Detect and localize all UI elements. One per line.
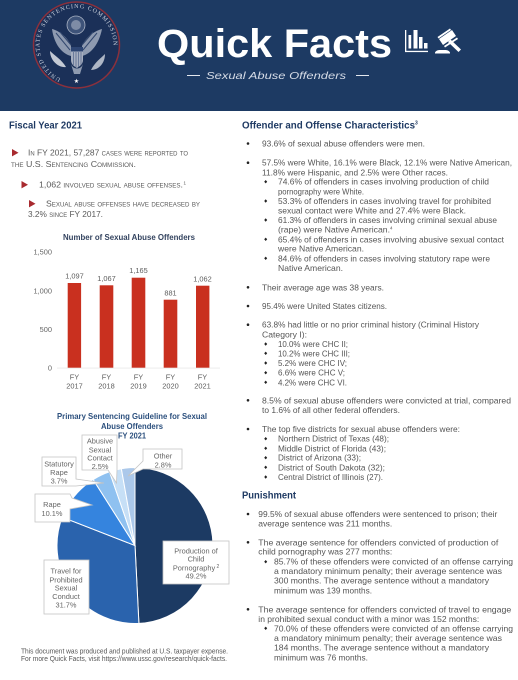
callout: other: 2.8%: [155, 460, 172, 470]
fiscal year facts: 3.2% since FY 2017.: [28, 209, 103, 219]
heading: fiscal year: Fiscal Year 2021: [9, 120, 82, 132]
header banner: [0, 0, 518, 111]
pie title: [57, 411, 207, 440]
characteristics list: Central District of Illinois (27).: [278, 472, 383, 482]
punishment list: average sentence was 211 months.: [258, 518, 392, 528]
icon: gavel: [435, 28, 461, 54]
characteristics list: 10.0% were CHC II;: [278, 339, 348, 349]
characteristics list: pornography were White.: [278, 186, 364, 196]
punishment list: 300 months. The average sentence without a mandatory: [274, 576, 490, 586]
seal of the commission: UNITED STATES SENTENCING COMMISSION: [36, 4, 118, 82]
punishment list: 184 months. The average sentence without a mandatory: [274, 643, 490, 653]
x axis labels: [66, 372, 211, 390]
y axis labels: 1,500: [34, 248, 52, 257]
y axis labels: 1,000: [34, 286, 52, 296]
characteristics list: [247, 138, 512, 482]
callout: rape: [35, 494, 92, 522]
x axis labels: 2020: [162, 381, 179, 390]
characteristics list: 11.8% were Hispanic, and 2.5% were Other races.: [262, 167, 448, 177]
x axis labels: 2019: [130, 381, 147, 390]
pie chart: primary sentencing guideline: [35, 411, 229, 623]
bullet markers: [247, 142, 267, 479]
callout: production of child pornography: Production of: [174, 546, 219, 556]
chart title: Number of Sexual Abuse Offenders: [63, 232, 195, 242]
characteristics list: 61.3% of offenders in cases involving criminal sexual abuse: [278, 215, 497, 225]
punishment list: The average sentence for offenders convicted of travel to engage: [258, 604, 512, 614]
characteristics list: Their average age was 38 years.: [262, 282, 384, 292]
punishment list: a mandatory minimum penalty; their average sentence was: [274, 633, 502, 643]
callout: other: [128, 449, 182, 476]
characteristics list: to 1.6% of all other federal offenders.: [262, 405, 400, 415]
footer note: [21, 648, 228, 663]
heading: offender and offense characteristics: Offender and Offense Characteristics: [242, 120, 415, 132]
characteristics list: District of South Dakota (32);: [278, 462, 385, 472]
fiscal year facts: Sexual abuse offenses have decreased by: [46, 198, 200, 208]
punishment list: 85.7% of these offenders were convicted of an offense carrying: [274, 557, 513, 567]
punishment list: minimum was 76 months.: [274, 652, 368, 662]
characteristics list: Native American.: [278, 263, 343, 273]
callout: abusive sexual contact: Sexual: [89, 446, 112, 454]
characteristics list: 4.2% were CHC VI.: [278, 377, 347, 387]
callout: production of child pornography: Pornography: [173, 564, 215, 572]
callout: statutory rape: Rape: [50, 468, 68, 477]
punishment list: The average sentence for offenders convicted of production of: [258, 537, 499, 547]
footer note: For more Quick Facts, visit https://www.ussc.gov/research/quick-facts.: [21, 656, 227, 663]
punishment list: minimum was 139 months.: [274, 585, 372, 595]
y axis labels: [34, 248, 52, 372]
bar values: 1,097: [65, 272, 84, 280]
characteristics list: were Native American.: [277, 244, 364, 254]
y axis labels: 0: [48, 364, 52, 372]
y axis labels: 500: [40, 325, 52, 334]
callout: production of child pornography: 2: [216, 564, 220, 570]
punishment list: in prohibited sexual conduct with a minor was 152 months:: [258, 614, 479, 624]
characteristics list: 63.8% had little or no prior criminal history (Criminal History: [262, 320, 480, 330]
callout: travel for prohibited sexual conduct: 31.7%: [56, 600, 77, 610]
callout: rape: Rape: [43, 500, 61, 509]
characteristics list: 5.2% were CHC IV;: [278, 358, 347, 368]
characteristics list: (rape) were Native American.: [278, 225, 390, 235]
fiscal year facts: In FY 2021, 57,287 cases were reported to: [28, 148, 188, 158]
footer note: This document was produced and published at U.S. taxpayer expense.: [21, 648, 228, 656]
bar chart: number of sexual abuse offenders: [34, 232, 220, 390]
callout: travel for prohibited sexual conduct: [44, 560, 89, 614]
bar values: [65, 266, 212, 298]
x axis labels: FY: [198, 372, 207, 382]
callout: abusive sexual contact: 2.5%: [92, 462, 109, 471]
bullet markers: [247, 513, 267, 630]
characteristics list: District of Arizona (33);: [278, 453, 361, 463]
callout: travel for prohibited sexual conduct: Prohibited: [49, 576, 83, 584]
fiscal year facts: [11, 148, 200, 219]
x axis labels: FY: [166, 372, 175, 382]
characteristics list: 93.6% of sexual abuse offenders were men.: [262, 138, 425, 148]
callout: travel for prohibited sexual conduct: Sexual: [55, 584, 78, 592]
pie title: Abuse Offenders: [101, 421, 163, 431]
fiscal year facts: the U.S. Sentencing Commission.: [11, 159, 136, 169]
x axis labels: FY: [102, 372, 111, 382]
callout: rape: 10.1%: [42, 509, 63, 518]
bar values: 1,062: [193, 274, 212, 284]
characteristics list: The top five districts for sexual abuse offenders were:: [262, 424, 460, 434]
characteristics list: 65.4% of offenders in cases involving abusive sexual contact: [278, 234, 505, 244]
callout: production of child pornography: Child: [188, 554, 204, 564]
icon: bar chart: [405, 30, 428, 52]
title: Quick Facts: [157, 22, 392, 66]
callout: travel for prohibited sexual conduct: Travel for: [51, 566, 82, 576]
callout: travel for prohibited sexual conduct: Conduct: [52, 592, 80, 601]
characteristics list: 84.6% of offenders in cases involving statutory rape were: [278, 253, 490, 263]
characteristics list: 95.4% were United States citizens.: [262, 301, 387, 311]
bars: [68, 278, 209, 368]
seal of the commission: ★: [74, 78, 79, 85]
characteristics list: 57.5% were White, 16.1% were Black, 12.1% were Native American,: [262, 158, 512, 168]
pie slices: [57, 468, 213, 623]
heading: punishment: Punishment: [242, 490, 296, 502]
characteristics list: 53.3% of offenders in cases involving travel for prohibited: [278, 196, 491, 206]
bar values: 881: [164, 288, 177, 298]
characteristics list: 8.5% of sexual abuse offenders were convicted at trial, compared: [262, 395, 511, 405]
callout: other: Other: [154, 452, 173, 460]
callout: abusive sexual contact: Contact: [87, 454, 113, 462]
x axis labels: 2017: [66, 381, 83, 390]
characteristics list: sexual contact were White and 27.4% were Black.: [278, 205, 466, 215]
fiscal year facts: 1: [184, 180, 186, 186]
x axis labels: 2018: [98, 381, 115, 390]
x axis labels: 2021: [194, 381, 211, 390]
punishment list: 70.0% of these offenders were convicted of an offense carrying: [274, 623, 513, 633]
characteristics list: 10.2% were CHC III;: [278, 348, 350, 358]
bar values: 1,165: [129, 266, 148, 275]
bar values: 1,067: [97, 274, 116, 283]
punishment list: child pornography was 277 months:: [258, 547, 392, 557]
characteristics list: 6.6% were CHC V;: [278, 368, 345, 378]
characteristics list: Middle District of Florida (43);: [278, 443, 386, 453]
punishment list: [247, 509, 513, 662]
pie title: Primary Sentencing Guideline for Sexual: [57, 411, 207, 421]
punishment list: 99.5% of sexual abuse offenders were sentenced to prison; their: [258, 509, 497, 519]
characteristics list: Category I):: [262, 329, 307, 339]
characteristics list: Northern District of Texas (48);: [278, 434, 389, 444]
x axis labels: FY: [70, 372, 79, 382]
characteristics list: 74.6% of offenders in cases involving production of child: [278, 177, 489, 187]
subtitle: Sexual Abuse Offenders: [206, 70, 347, 82]
callout: abusive sexual contact: [82, 435, 117, 483]
callout: production of child pornography: 49.2%: [186, 572, 207, 580]
callout: abusive sexual contact: Abusive: [87, 436, 113, 446]
x axis labels: FY: [134, 372, 143, 382]
callout: production of child pornography: [163, 541, 229, 584]
fiscal year facts: 1,062 involved sexual abuse offenses.: [39, 180, 183, 190]
callout: statutory rape: 3.7%: [51, 476, 68, 486]
pie title: FY 2021: [118, 430, 146, 440]
callout: statutory rape: Statutory: [44, 460, 74, 468]
heading: offender and offense characteristics: 3: [415, 120, 418, 126]
punishment list: a mandatory minimum penalty; their average sentence was: [274, 566, 502, 576]
characteristics list: 4: [390, 226, 393, 230]
callout: statutory rape: [42, 457, 104, 486]
